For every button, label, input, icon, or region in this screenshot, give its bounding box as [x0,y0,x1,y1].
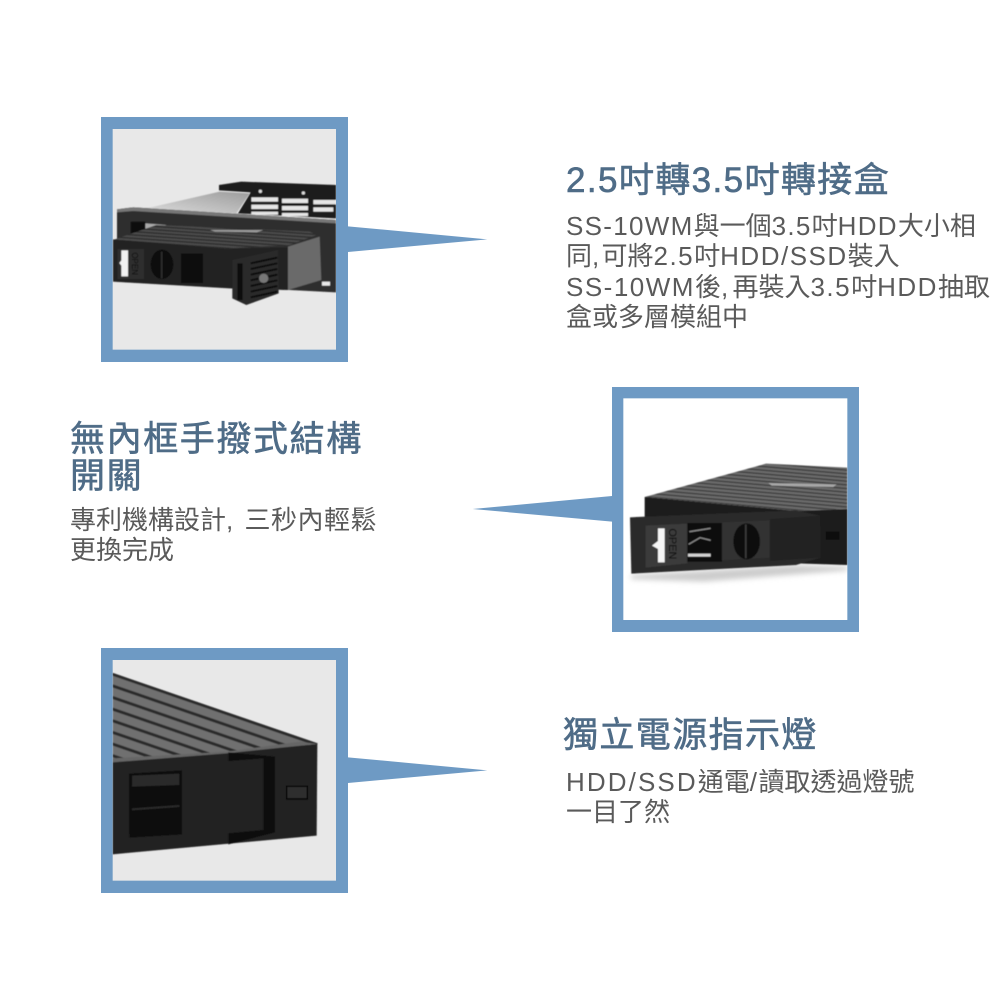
frame: latch photo [473,387,859,632]
text block: latch description: 更換完成 [70,535,174,565]
photo: open latch [630,464,847,582]
text block: latch description: 專利機構設計, 三秒內輕鬆 [70,505,377,535]
heading: trayless latch [70,420,363,496]
panel: product photos with pointers [101,117,859,893]
photo: open drive adapter: OPEN [130,252,139,275]
photo: open latch: OPEN [666,528,678,560]
heading: power indicator: 獨立電源指示燈 [563,716,818,755]
text block: power indicator description: 一目了然 [566,797,670,827]
text block: power indicator description [566,767,914,827]
heading: trayless latch: 無內框手撥式結構 [70,420,363,459]
heading: 2.5 to 3.5 adapter: 2.5吋轉3.5吋轉接盒 [566,160,890,200]
photo: drive corner with LED window [113,674,317,854]
text block: adapter description [566,211,990,332]
text block: adapter description: 盒或多層模組中 [566,302,748,332]
photo: open drive adapter [113,182,336,305]
heading: trayless latch: 開關 [70,457,143,496]
text block: adapter description: SS-10WM與一個3.5吋HDD大小相 [566,211,976,241]
text block: latch description [70,505,377,565]
text block: power indicator description: HDD/SSD通電/讀取透過燈號 [566,767,914,797]
text block: adapter description: 同, 可將2.5吋HDD/SSD裝入 [566,241,900,271]
frame: adapter photo [101,117,487,362]
text block: adapter description: SS-10WM後, 再裝入3.5吋HDD抽取 [566,272,990,302]
frame: power indicator photo [101,648,487,893]
